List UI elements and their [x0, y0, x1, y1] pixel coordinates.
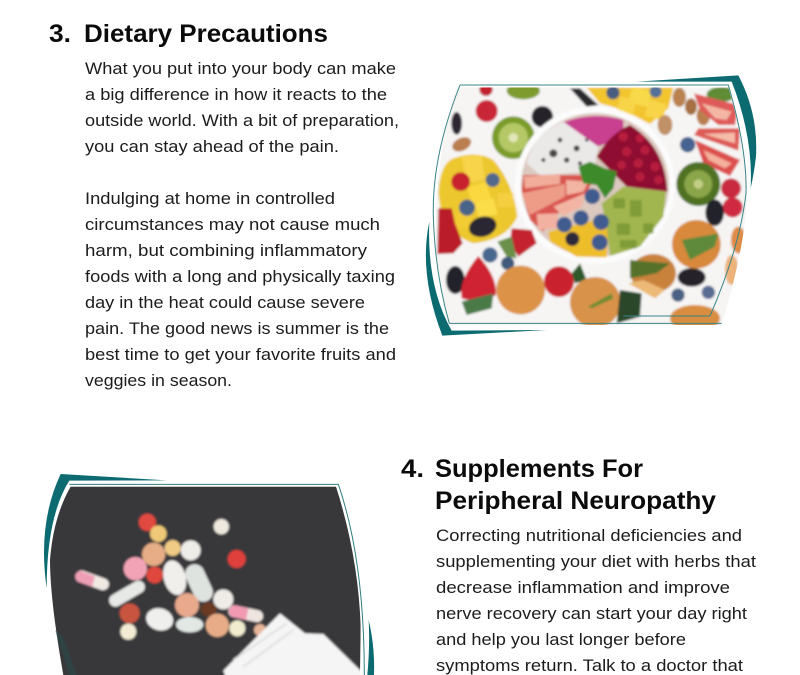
text block: supplements advice: nerve recovery can start your day right: [436, 604, 747, 623]
heading: 3. Dietary Precautions: Dietary Precautions: [84, 20, 328, 48]
text block: dietary advice: [85, 189, 396, 390]
frame: teal swooshes: [44, 474, 374, 675]
photo: spilled pills in teal frame: [43, 474, 374, 675]
text block: dietary advice: circumstances may not cause much: [85, 215, 380, 234]
text block: dietary intro: [85, 59, 399, 156]
text block: dietary advice: foods with a long and physically taxing: [85, 267, 395, 286]
mango left: [438, 155, 517, 243]
text block: supplements advice: [436, 526, 756, 675]
text block: supplements advice: decrease inflammation and improve: [436, 578, 730, 597]
frame: teal swooshes: [426, 75, 756, 336]
top fruits: [476, 100, 498, 122]
text block: dietary advice: day in the heat could cause severe: [85, 293, 365, 312]
text block: dietary intro: outside world. With a bit of preparation,: [85, 111, 399, 130]
lower fruits: [510, 228, 537, 257]
text block: dietary advice: Indulging at home in controlled: [85, 189, 335, 208]
text block: supplements advice: supplementing your diet with herbs that: [436, 552, 756, 571]
text block: supplements advice: symptoms return. Talk to a doctor that: [436, 656, 743, 675]
photo: fruit bowl in teal frame: [423, 75, 757, 336]
text block: dietary intro: a big difference in how it reacts to the: [85, 85, 387, 104]
text block: dietary advice: pain. The good news is summer is the: [85, 319, 389, 338]
heading: 4. Supplements For Peripheral Neuropathy: [401, 455, 716, 515]
text block: supplements advice: Correcting nutritional deficiencies and: [436, 526, 742, 545]
text block: dietary intro: What you put into your body can make: [85, 59, 396, 78]
bowl: [518, 108, 632, 160]
text block: dietary advice: best time to get your favorite fruits and: [85, 345, 396, 364]
text block: dietary intro: you can stay ahead of the pain.: [85, 137, 339, 156]
heading: 4. Supplements For Peripheral Neuropathy: Peripheral Neuropathy: [435, 487, 716, 515]
text block: supplements advice: and help you last longer before: [436, 630, 686, 649]
text block: dietary advice: veggies in season.: [85, 371, 232, 390]
strawberries right: [694, 93, 738, 125]
heading: 4. Supplements For Peripheral Neuropathy: 4.: [401, 455, 424, 483]
heading: 3. Dietary Precautions: 3.: [49, 20, 71, 48]
heading: 4. Supplements For Peripheral Neuropathy: Supplements For: [435, 455, 643, 483]
text block: dietary advice: harm, but combining inflammatory: [85, 241, 368, 260]
